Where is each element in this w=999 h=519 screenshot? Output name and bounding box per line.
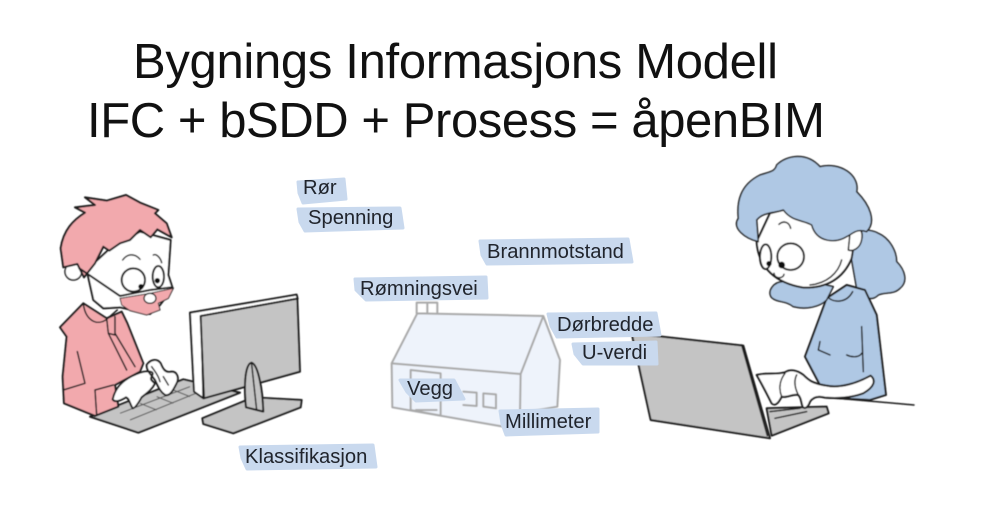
label: Rør <box>298 177 346 203</box>
monitor <box>190 295 302 433</box>
face features <box>760 222 842 285</box>
label: Rør: Rør <box>303 177 337 199</box>
illustration: house <box>392 303 560 428</box>
ear <box>65 263 82 280</box>
eyes <box>122 255 164 292</box>
face <box>757 202 857 288</box>
shirt details <box>818 292 863 372</box>
label: Dørbredde: Dørbredde <box>557 314 654 336</box>
hands <box>113 360 178 408</box>
hair <box>61 195 172 277</box>
label: Millimeter: Millimeter <box>505 411 592 433</box>
moustache and glasses <box>79 268 173 315</box>
label: U-verdi: U-verdi <box>582 342 647 364</box>
label: Spenning: Spenning <box>308 207 393 229</box>
lower hair <box>770 278 833 308</box>
label: Brannmotstand: Brannmotstand <box>487 241 624 263</box>
table line <box>830 398 914 405</box>
ear <box>848 229 862 250</box>
title <box>87 35 825 148</box>
label: Klassifikasjon: Klassifikasjon <box>245 446 367 468</box>
shirt details <box>63 303 135 415</box>
illustration: woman at laptop <box>632 156 914 438</box>
arm and hands <box>757 370 874 408</box>
laptop screen <box>632 333 770 438</box>
body <box>60 303 143 416</box>
top hair <box>737 156 871 242</box>
title: IFC + bSDD + Prosess = åpenBIM <box>87 94 825 148</box>
torso <box>805 285 886 400</box>
title: Bygnings Informasjons Modell <box>133 35 778 89</box>
keyboard <box>90 379 240 433</box>
label: Rømningsvei: Rømningsvei <box>360 278 478 300</box>
face <box>87 232 173 314</box>
laptop keyboard <box>767 407 829 436</box>
illustration: man at desktop computer <box>60 195 302 433</box>
label: Vegg: Vegg <box>407 378 453 400</box>
back hair <box>847 230 905 298</box>
label: Vegg <box>400 378 464 401</box>
